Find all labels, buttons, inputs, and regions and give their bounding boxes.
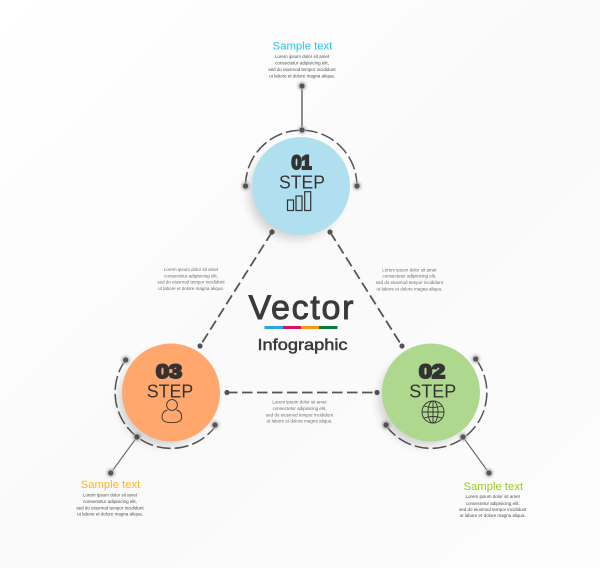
- step 2 text block: [459, 494, 527, 518]
- bottom-edge text block: [266, 400, 334, 424]
- step 2 number: 02: [419, 362, 445, 383]
- icon: person: [162, 400, 182, 423]
- connector: step 2 to step 3: [224, 390, 380, 395]
- top text block: [268, 54, 336, 78]
- top text block: consectetur adipisicing elit,: [275, 60, 329, 66]
- right-edge text block: sed do eiusmod tempor incididunt: [376, 280, 444, 285]
- step 2 callout line: [382, 355, 493, 477]
- bottom-edge text block: sed do eiusmod tempor incididunt: [266, 412, 334, 417]
- step 2 text block: ut labore et dolore magna aliqua.: [460, 513, 526, 518]
- title: Vector: Vector: [248, 289, 354, 327]
- left-edge text block: Lorem ipsum dolor sit amet: [164, 267, 219, 272]
- step 2 text block: Lorem ipsum dolor sit amet: [466, 494, 521, 499]
- step 1 dashed arc: [246, 130, 357, 186]
- left-edge text block: consectetur adipisicing elit,: [164, 273, 218, 278]
- step 3 callout line: [106, 356, 219, 477]
- right-edge text block: consectetur adipisicing elit,: [383, 274, 436, 279]
- step 1 circle: [249, 137, 350, 239]
- bottom-edge text block: consectetur adipisicing elit,: [273, 406, 326, 411]
- bottom-edge text block: Lorem ipsum dolor sit amet: [272, 400, 327, 405]
- step 3 heading: Sample text: [81, 479, 141, 491]
- step 2 node: [379, 344, 493, 477]
- step 3 text block: consectetur adipisicing elit,: [83, 499, 137, 504]
- step 2 dashed arc: [386, 359, 487, 448]
- bottom-edge text block: ut labore et dolore magna aliqua.: [267, 419, 332, 424]
- top text block: Lorem ipsum dolor sit amet: [275, 54, 330, 59]
- step 3 text block: Lorem ipsum dolor sit amet: [83, 493, 138, 498]
- right-edge text block: ut labore et dolore magna aliqua.: [377, 286, 442, 291]
- right-edge text block: [376, 267, 444, 291]
- left-edge text block: [157, 267, 225, 291]
- step 1 number: 01: [292, 153, 312, 174]
- top text block: ut labore et dolore magna aliqua.: [269, 74, 335, 78]
- top heading: Sample text: [273, 40, 333, 52]
- icon: bar chart: [288, 192, 311, 210]
- icon: globe: [422, 401, 444, 423]
- left-edge text block: ut labore et dolore magna aliqua.: [158, 286, 224, 291]
- step 3 number: 03: [156, 362, 182, 383]
- right-edge text block: Lorem ipsum dolor sit amet: [382, 267, 437, 272]
- subtitle: Infographic: Infographic: [258, 337, 348, 354]
- step 2 circle: [379, 344, 480, 446]
- left-edge text block: sed do eiusmod tempor incididunt: [157, 280, 225, 285]
- step 1 callout line: [241, 82, 361, 190]
- step 3 node: [106, 344, 220, 477]
- step 3 dashed arc: [115, 360, 216, 448]
- step 2 text block: consectetur adipisicing elit,: [466, 501, 520, 506]
- colour bar: [264, 326, 338, 329]
- step 3 text block: [76, 493, 144, 517]
- connector: step 1 to step 2: [327, 229, 405, 349]
- step 3 text block: sed do eiusmod tempor incididunt: [76, 506, 144, 510]
- step 2 label: STEP: [409, 380, 456, 402]
- step 3 label: STEP: [147, 380, 193, 402]
- top text block: sed do eiusmod tempor incididunt: [268, 67, 336, 72]
- step 1 node: [241, 82, 361, 239]
- step 3 text block: ut labore et dolore magna aliqua.: [77, 512, 143, 517]
- connector: step 1 to step 3: [197, 229, 275, 349]
- step 1 label: STEP: [279, 171, 325, 192]
- step 3 circle: [119, 344, 220, 446]
- step 2 text block: sed do eiusmod tempor incididunt: [459, 507, 527, 512]
- step 2 heading: Sample text: [463, 481, 524, 493]
